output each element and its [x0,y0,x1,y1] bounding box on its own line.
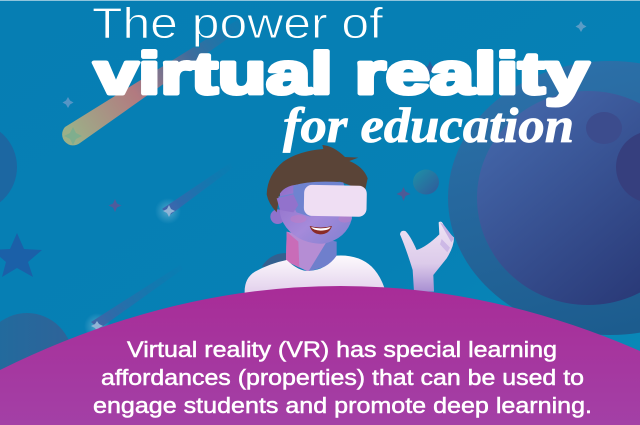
hair [267,145,368,212]
illustration: boy wearing VR headset [245,145,454,293]
intro text line 1: Virtual reality (VR) has special learning [127,337,557,362]
headset side [277,194,298,212]
sparkles [62,21,586,212]
planet: left edge [0,122,17,212]
intro text line 2: affordances (properties) that can be used to [101,365,584,390]
comet: middle [155,163,233,224]
headset visor [304,185,367,217]
neck [286,232,337,272]
comet: lower [84,265,183,339]
intro text line 3: engage students and promote deep learning. [93,393,592,418]
cheeks [290,215,352,223]
planet: large right [448,61,640,335]
headset strap [278,182,345,217]
backpack shoulder [262,253,288,268]
title: the power of: The power of [92,0,384,48]
ear [270,209,285,224]
panel: purple intro [0,286,640,425]
hand [400,222,454,292]
moon [413,170,439,194]
title: for education: for education [283,97,574,153]
planet: bottom left [0,313,73,407]
face [280,180,352,244]
t-shirt [245,256,386,293]
star: bottom left [0,233,42,277]
comet: large [62,12,257,145]
mouth [310,226,332,234]
title: virtual reality: virtual reality [94,42,589,106]
